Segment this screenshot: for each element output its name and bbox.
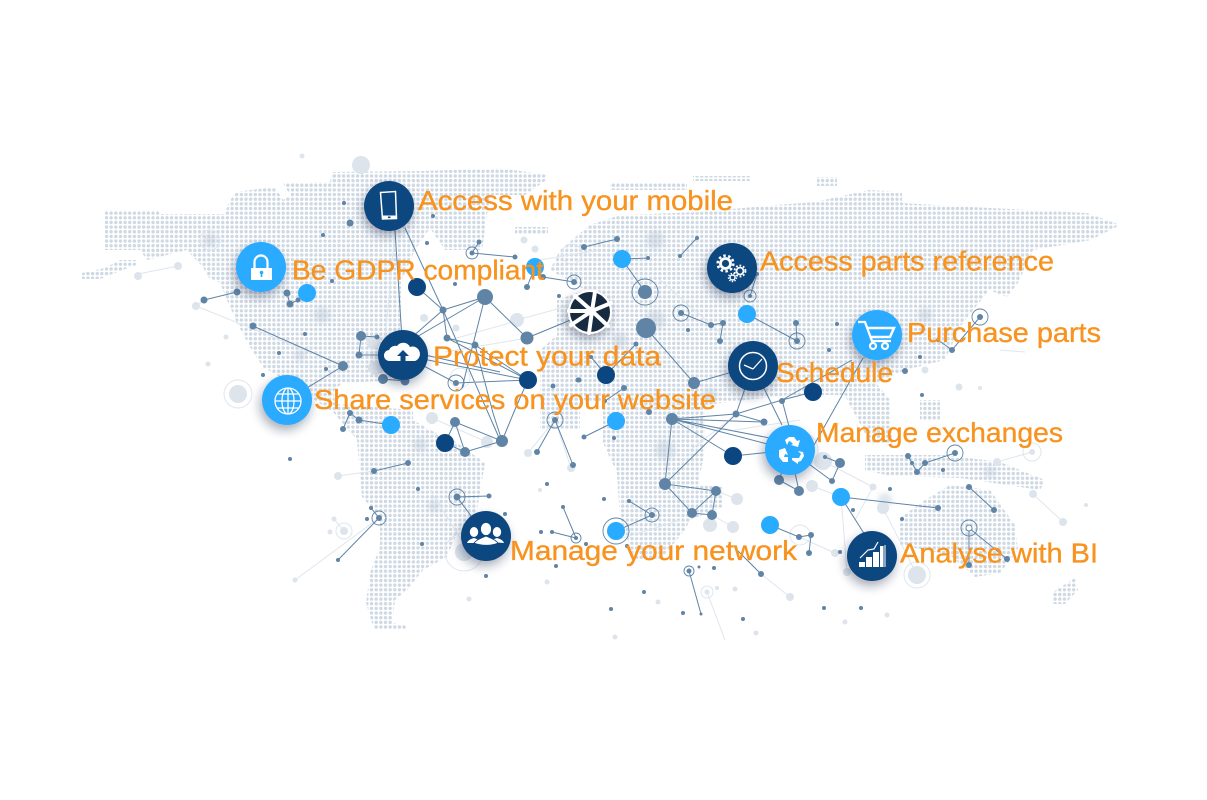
network nodes xyxy=(200,201,1010,621)
world network infographic xyxy=(82,154,1117,640)
icon: shopping cart xyxy=(852,310,902,360)
label: Manage your network: Manage your network xyxy=(510,535,797,566)
label: Share services on your website: Share services on your website xyxy=(314,384,716,415)
icon: gears xyxy=(707,243,757,293)
icon: clock xyxy=(728,341,778,391)
icon: padlock xyxy=(236,242,286,292)
icon: group of people xyxy=(461,511,511,561)
label: Protect your data: Protect your data xyxy=(433,340,662,372)
target rings xyxy=(372,247,988,576)
label: Access with your mobile: Access with your mobile xyxy=(418,185,733,216)
icon: cloud upload xyxy=(378,330,428,380)
network connection lines xyxy=(204,228,1007,614)
dotted world map xyxy=(60,162,1140,627)
icon: globe xyxy=(262,375,312,425)
label: Manage exchanges: Manage exchanges xyxy=(816,417,1063,448)
icon: growth bar chart xyxy=(847,531,897,581)
label: Be GDPR compliant: Be GDPR compliant xyxy=(292,254,544,286)
icon: central wheel logo xyxy=(568,290,612,334)
bright blue nodes xyxy=(298,250,850,540)
label: Analyse with BI: Analyse with BI xyxy=(900,538,1098,568)
icon: mobile phone xyxy=(364,181,414,231)
faint background network xyxy=(134,154,1088,640)
label: Schedule: Schedule xyxy=(776,357,893,388)
dark navy nodes xyxy=(408,278,822,465)
label: Purchase parts: Purchase parts xyxy=(907,317,1101,348)
icon: recycle xyxy=(765,425,815,475)
label: Access parts reference: Access parts reference xyxy=(760,246,1054,276)
